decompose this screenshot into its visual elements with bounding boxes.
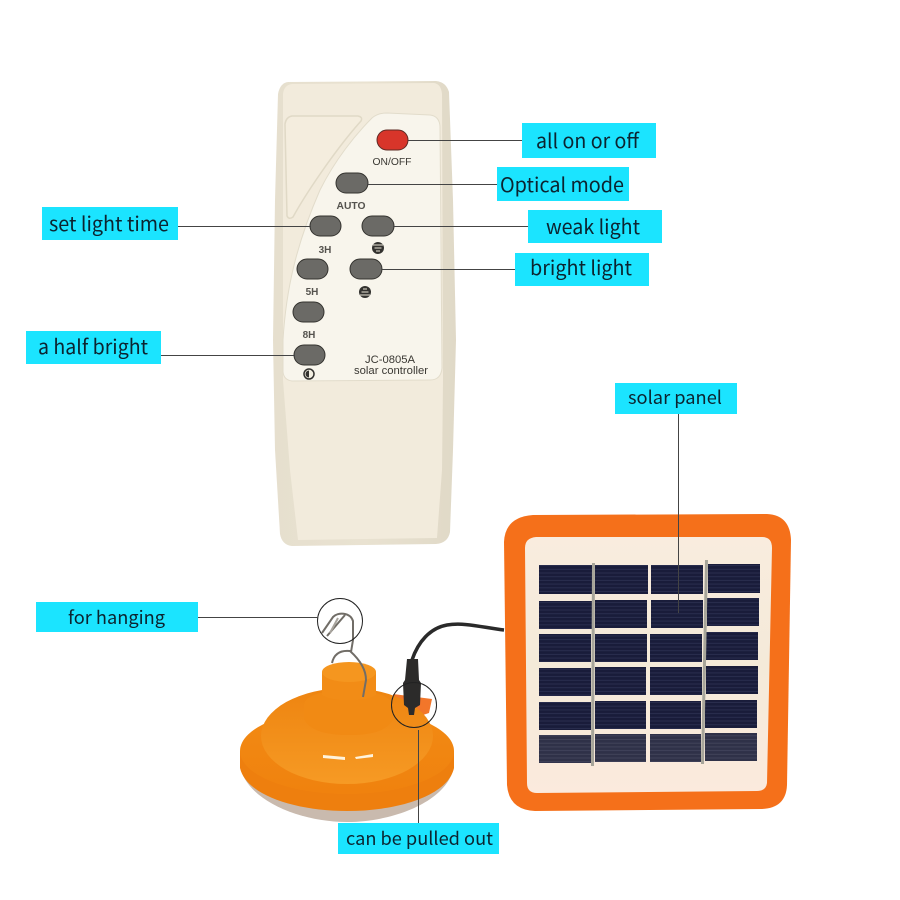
button: auto [336, 173, 368, 193]
lamp cap [322, 662, 376, 682]
label: weak light: weak light [546, 211, 640, 240]
remote control [273, 81, 456, 546]
label: Optical mode: Optical mode [500, 169, 624, 198]
label: solar panel: solar panel [628, 384, 722, 410]
inner panel [283, 113, 442, 381]
plug [403, 659, 421, 715]
label: weak light [528, 210, 662, 243]
label: all on or off: all on or off [536, 125, 640, 154]
label: for hanging [36, 602, 198, 632]
label: bright light [515, 252, 649, 286]
button: on/off [377, 130, 408, 150]
button: 5H [297, 259, 328, 279]
button: 3H [310, 216, 341, 236]
lamp neck [322, 672, 376, 700]
remote front face [283, 83, 443, 540]
solar cells [539, 564, 760, 763]
remote labels: ON/OFF [372, 157, 412, 168]
silver bus bars [592, 560, 706, 766]
highlights [323, 754, 373, 760]
button: half bright [294, 345, 325, 365]
label: for hanging: for hanging [68, 604, 165, 630]
power cord [403, 624, 504, 715]
label: set light time: set light time [49, 208, 169, 237]
metal hook [322, 614, 366, 697]
tab behind dome [393, 694, 432, 716]
battery window [285, 116, 362, 218]
label: a half bright: a half bright [38, 331, 148, 360]
lamp diffuser [240, 765, 454, 822]
lamp step [304, 690, 393, 735]
remote labels [303, 157, 428, 377]
label: bright light: bright light [530, 252, 632, 281]
remote labels: solar controller [354, 365, 428, 377]
remote labels: 5H [306, 287, 318, 298]
callout circle: plug [392, 682, 436, 728]
orange frame [504, 514, 791, 811]
cream backing [525, 537, 772, 793]
remote labels: 3H [319, 245, 331, 256]
button: 8H [293, 302, 324, 322]
callout circle: hook [318, 598, 362, 644]
orange lamp [240, 614, 454, 822]
label: all on or off [522, 123, 656, 158]
lamp rim top [240, 708, 454, 794]
icon: half bright [304, 369, 314, 379]
remote labels: 8H [303, 330, 315, 341]
remote body [273, 81, 456, 546]
remote labels: JC-0805A [365, 354, 416, 366]
remote labels: AUTO [336, 201, 366, 212]
leader lines [161, 140, 678, 823]
solar panel [504, 514, 791, 811]
label: solar panel [615, 383, 737, 414]
button: weak light [362, 216, 394, 236]
lamp dome [261, 688, 433, 784]
button: bright light [350, 259, 382, 279]
icon: bright light [359, 286, 371, 298]
icon: weak light [372, 242, 384, 254]
lamp rim side [240, 751, 454, 811]
label: can be pulled out: can be pulled out [346, 825, 493, 851]
